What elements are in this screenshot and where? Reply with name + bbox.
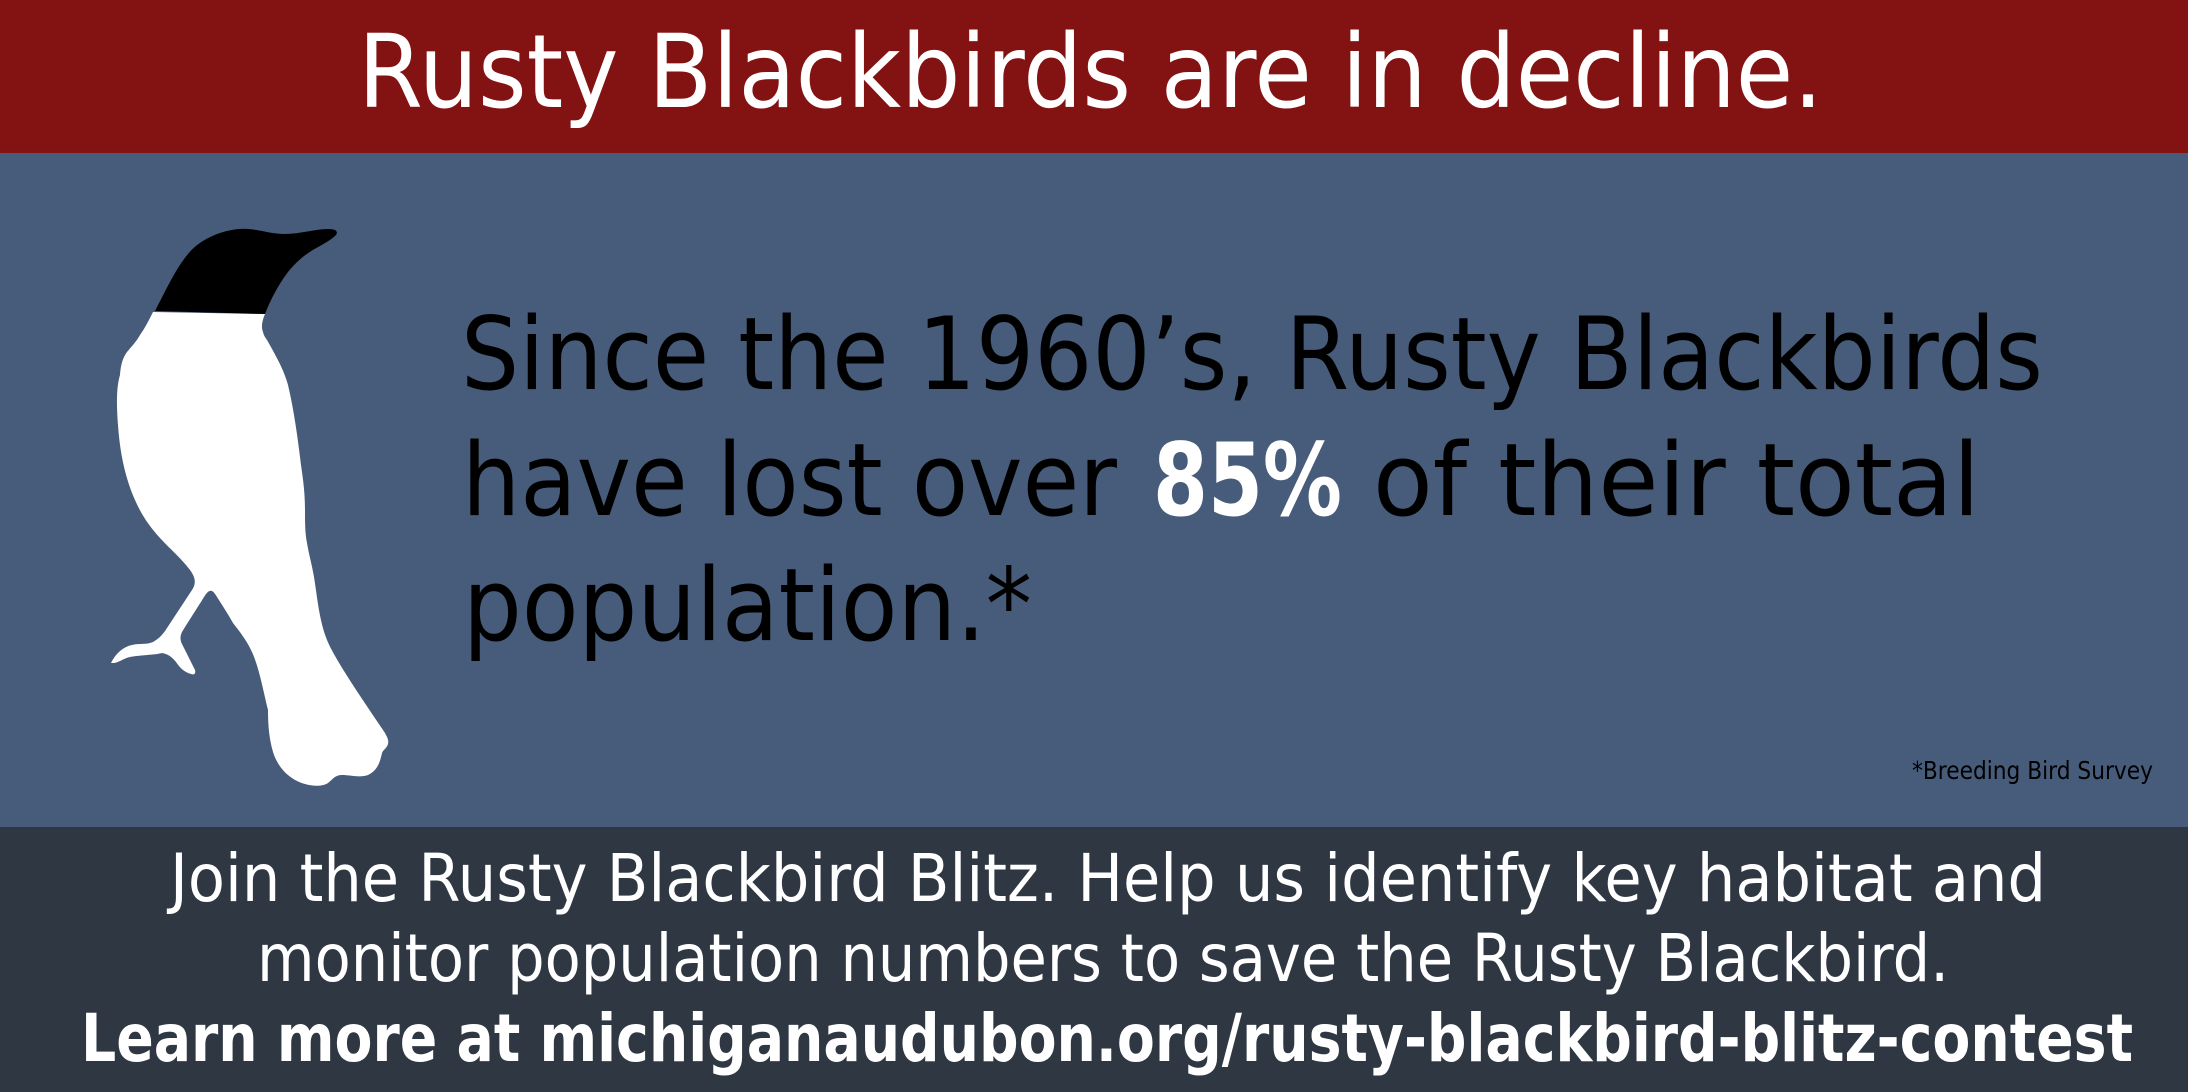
statement line 3: population.* [463, 546, 1032, 664]
panel: main blue background [0, 153, 2188, 827]
statement line 2 end: of their total [1373, 421, 1980, 539]
bird body [111, 312, 388, 786]
footer line 2: monitor population numbers to save the Rusty Blackbird. [257, 920, 1949, 997]
highlighted figure: 85%: 85% [1153, 421, 1342, 539]
footer call to action [81, 840, 2133, 1077]
statement line 2 start: have lost over [462, 421, 1117, 539]
footnote: source: *Breeding Bird Survey [1912, 756, 2153, 785]
main statement text [461, 295, 2043, 664]
bird head [155, 229, 337, 314]
title: Rusty Blackbirds are in decline. [358, 13, 1823, 132]
footer line 1: Join the Rusty Blackbird Blitz. Help us identify key habitat and [166, 840, 2046, 917]
statement line 1: Since the 1960’s, Rusty Blackbirds [461, 295, 2043, 413]
panel: dark footer band [0, 827, 2188, 1092]
panel: red header band [0, 0, 2188, 153]
icon: bird silhouette [111, 229, 388, 786]
